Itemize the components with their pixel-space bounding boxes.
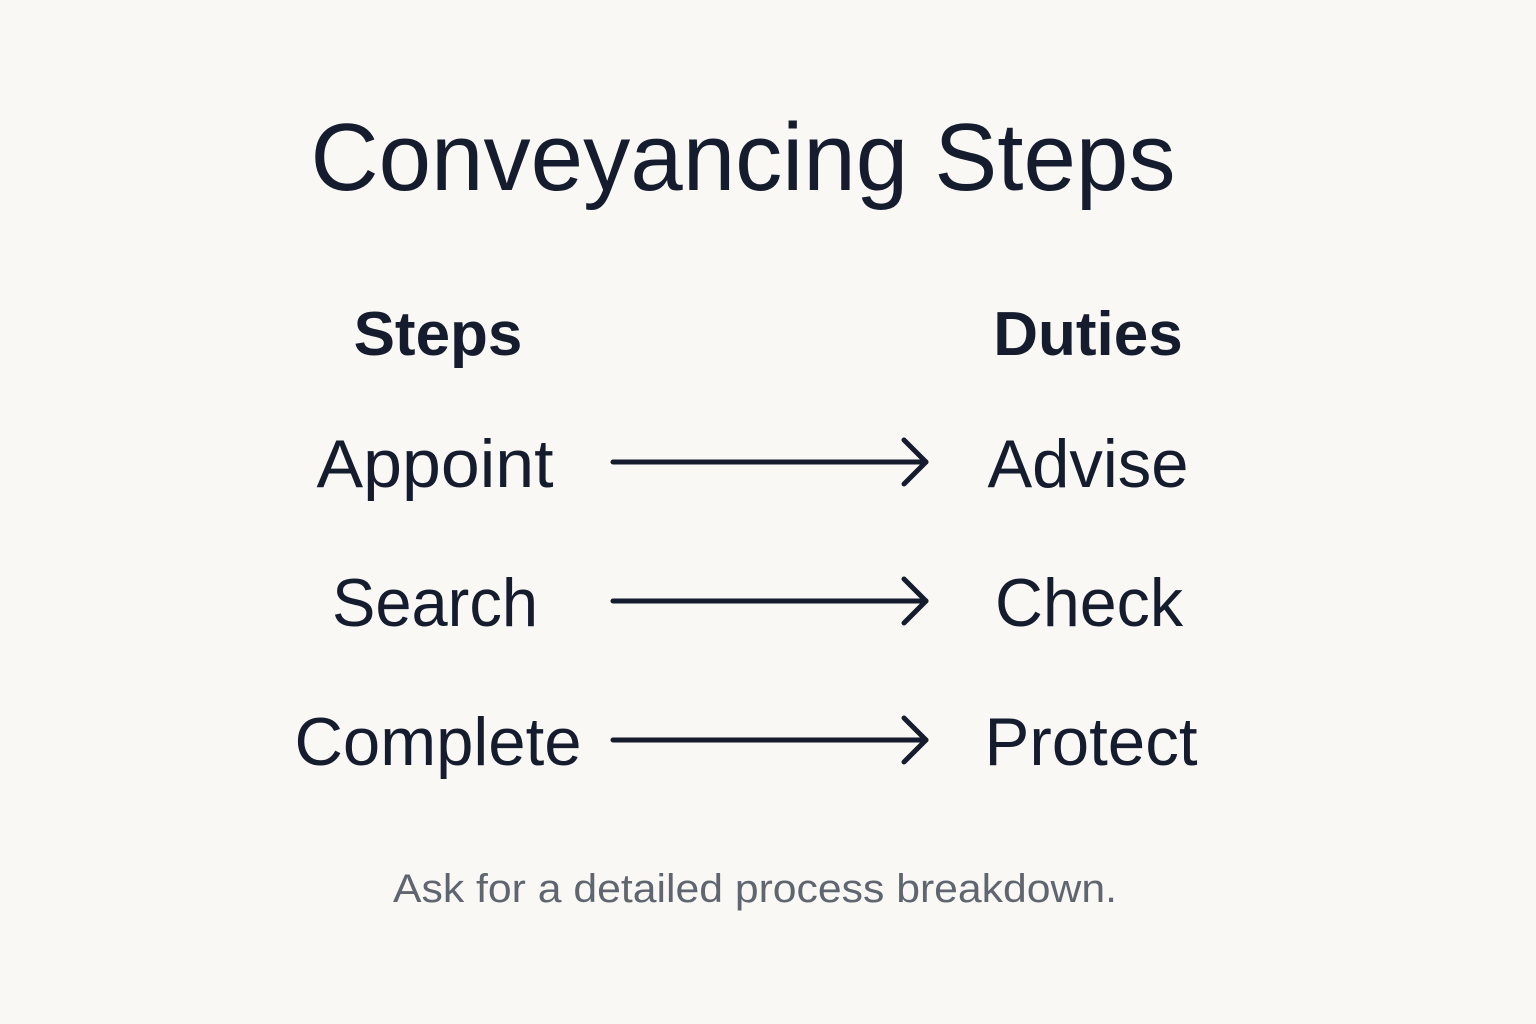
- column header: Steps: Steps: [354, 300, 522, 369]
- footer note: Ask for a detailed process breakdown.: [393, 867, 1117, 911]
- row 3: Complete to Protect: [294, 704, 1198, 780]
- step: Search: Search: [332, 565, 538, 641]
- title: Conveyancing Steps: [310, 104, 1176, 211]
- duty: Protect: Protect: [984, 704, 1198, 780]
- duty: Advise: Advise: [988, 426, 1188, 502]
- row 1: Appoint to Advise: [316, 426, 1188, 502]
- row 2: Search to Check: [332, 565, 1184, 641]
- column header: Duties: Duties: [993, 300, 1183, 369]
- arrow 3: [613, 718, 926, 762]
- arrow 1: [613, 440, 926, 484]
- arrow 2: [613, 579, 926, 623]
- duty: Check: Check: [995, 565, 1184, 641]
- step: Appoint: Appoint: [316, 426, 554, 502]
- step: Complete: Complete: [294, 704, 582, 780]
